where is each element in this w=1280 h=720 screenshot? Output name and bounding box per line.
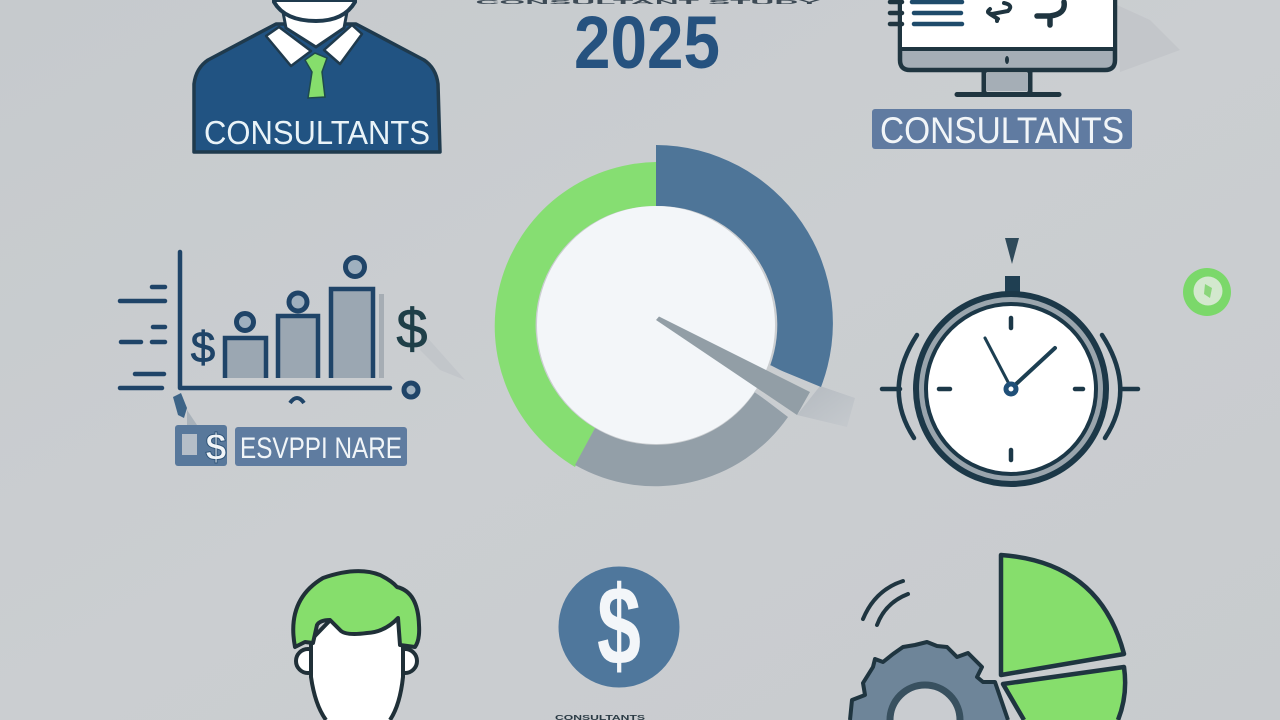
power dot xyxy=(1005,56,1009,64)
screen lines xyxy=(912,2,962,24)
clock face xyxy=(926,304,1096,474)
body xyxy=(194,24,440,152)
bar shadow xyxy=(379,294,384,378)
label text: CONSULTANTS xyxy=(880,110,1124,151)
crown tip xyxy=(1005,238,1019,264)
blue segment xyxy=(656,145,833,387)
side ticks xyxy=(890,2,902,24)
circles xyxy=(236,258,364,330)
clipped title line: CONSULTANT STUDY xyxy=(476,0,825,6)
screen frame xyxy=(900,0,1115,70)
small marks xyxy=(404,383,418,397)
side ticks xyxy=(882,387,1138,391)
clock icon xyxy=(882,238,1138,484)
bar chart icon: ESVPPI NARE xyxy=(240,432,402,465)
face xyxy=(311,610,403,720)
side arcs xyxy=(899,335,1120,438)
upper pie wedge xyxy=(1001,555,1124,675)
label left box xyxy=(175,425,227,466)
needle xyxy=(656,316,810,415)
icon: person with green hair xyxy=(293,571,419,720)
lower pie wedge xyxy=(1003,667,1125,720)
green dot icon xyxy=(1183,268,1231,316)
diagonal shadow xyxy=(420,335,465,380)
base xyxy=(957,92,1059,97)
collar left xyxy=(266,27,311,66)
green segment xyxy=(495,162,656,467)
center disc xyxy=(537,206,775,444)
label box xyxy=(872,109,1132,149)
bar chart icon xyxy=(120,252,465,469)
bars xyxy=(225,289,373,378)
hair xyxy=(293,571,419,647)
label: CONSULTANTS xyxy=(204,114,430,151)
hub xyxy=(1006,384,1016,394)
hour ticks xyxy=(939,318,1083,460)
gear hole xyxy=(890,685,960,720)
title xyxy=(476,0,825,84)
icon: dollar coin xyxy=(558,563,680,688)
bar chart icon: $ xyxy=(396,297,428,360)
gray segment xyxy=(575,392,788,486)
stand xyxy=(984,71,1030,92)
motion arcs xyxy=(863,581,908,625)
ears xyxy=(296,649,320,673)
year: 2025 xyxy=(574,1,720,84)
icon: consultant with label xyxy=(194,0,440,152)
screen xyxy=(902,0,1113,48)
icon: gear and pie xyxy=(850,555,1125,720)
icon: monitor with label xyxy=(872,0,1180,151)
dollar marks xyxy=(988,3,1010,21)
label right box xyxy=(235,427,407,466)
outer ring xyxy=(916,294,1106,484)
tie xyxy=(305,53,327,98)
bar chart icon: $ xyxy=(205,427,227,469)
left ticks xyxy=(120,287,165,388)
dollar signs: $ xyxy=(191,323,215,372)
donut chart xyxy=(495,145,855,486)
gear xyxy=(850,642,1008,720)
shadow xyxy=(1117,5,1180,72)
tail shadow xyxy=(797,386,855,427)
collar right xyxy=(324,25,362,64)
head xyxy=(274,0,355,21)
icon: dollar coin: $ xyxy=(597,563,641,688)
hands xyxy=(985,338,1008,382)
neck xyxy=(283,12,347,47)
crown xyxy=(1005,276,1020,294)
axes xyxy=(180,252,390,388)
